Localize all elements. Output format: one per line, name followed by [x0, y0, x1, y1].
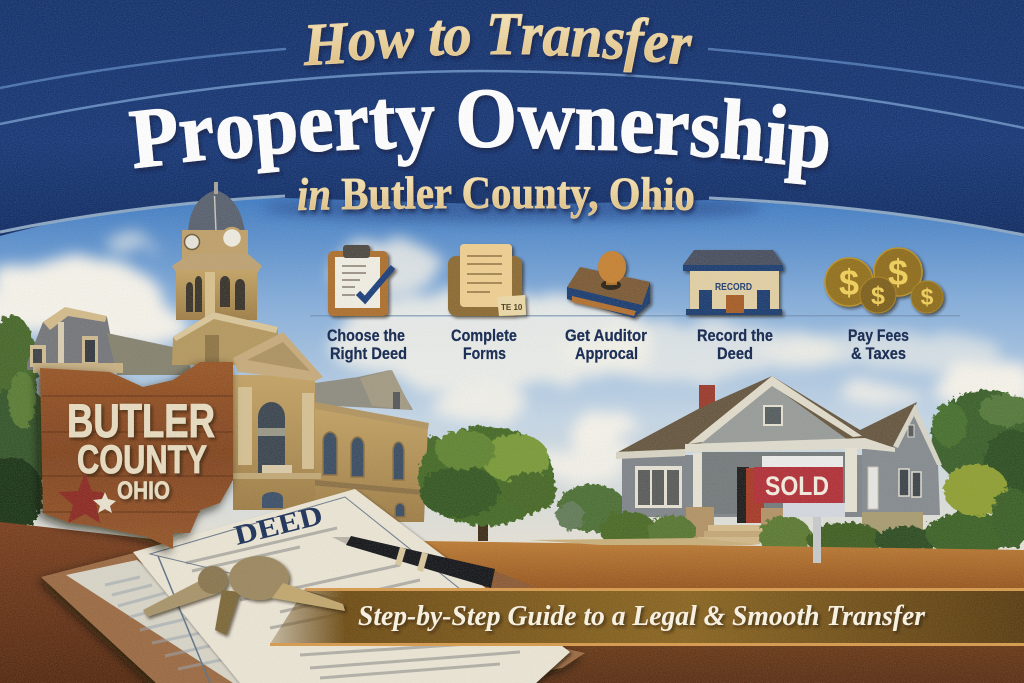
table: left wood	[0, 522, 260, 683]
courthouse: right wing	[240, 370, 429, 522]
folder: brown backing	[41, 553, 585, 683]
arc line: upper	[0, 49, 1024, 88]
step 3: get auditor approval	[565, 251, 650, 363]
steps row	[310, 244, 960, 363]
icon: forms folder: TE 10	[501, 303, 523, 312]
keys	[143, 556, 345, 635]
icon: gold coins: $	[839, 262, 859, 303]
arc line: lower	[0, 196, 1024, 235]
text: DEED heading: DEED	[231, 500, 326, 552]
text: complete forms: Complete	[451, 326, 517, 345]
text: BUTLER: BUTLER	[67, 394, 215, 447]
deed documents	[41, 489, 585, 683]
pen	[332, 536, 535, 589]
text: record the deed: Deed	[717, 344, 753, 363]
courthouse: tower	[172, 182, 278, 365]
house	[616, 376, 942, 544]
text: complete forms: Forms	[463, 344, 506, 363]
trees: far right	[931, 390, 1024, 510]
courthouse: left mansard wing	[27, 307, 192, 375]
house: main body	[616, 376, 895, 542]
icon: red star	[58, 473, 107, 523]
background: sky	[0, 170, 1024, 570]
icon: gold coins	[825, 248, 943, 313]
ohio wood sign	[40, 362, 233, 549]
text: COUNTY: COUNTY	[77, 438, 207, 482]
text: choose the right deed: Right Deed	[330, 344, 407, 363]
step 5: pay fees and taxes	[825, 248, 943, 363]
icon: white star	[93, 492, 116, 513]
step 4: record the deed	[683, 250, 783, 363]
icon: gold coins: $	[888, 252, 908, 293]
house: right wing	[862, 404, 942, 533]
document: deed sheet	[133, 489, 570, 683]
text: get auditor approcal: Get Auditor	[565, 326, 647, 345]
ground: wooden surface	[0, 540, 1024, 683]
house: steps	[698, 525, 763, 544]
icon: record building: RECORD	[715, 282, 752, 293]
text: choose the right deed: Choose the	[327, 326, 405, 345]
document: lower sheet	[66, 560, 300, 683]
text: pay fees and taxes: & Taxes	[851, 344, 906, 363]
house: chimney	[699, 385, 715, 413]
text: pay fees and taxes: Pay Fees	[848, 326, 909, 345]
step rule	[310, 315, 960, 316]
tree: central	[418, 426, 556, 541]
title line: in Butler County, Ohio: in Butler County, Ohio	[298, 176, 698, 224]
bushes	[600, 464, 1024, 558]
clouds	[0, 235, 1024, 484]
house: roof	[618, 376, 917, 452]
title line: Property Ownership: Property Ownership	[126, 70, 835, 187]
text: OHIO: OHIO	[117, 477, 170, 505]
banner: step-by-step guide	[270, 588, 1024, 646]
text: get auditor approcal: Approcal	[575, 344, 638, 363]
icon: stamp	[567, 251, 650, 318]
courthouse	[27, 182, 429, 522]
icon: gold coins: $	[871, 282, 885, 310]
arc line: middle	[0, 71, 1024, 128]
trees: behind courthouse right	[414, 435, 626, 532]
icon: gold coins: $	[921, 284, 934, 310]
step 2: complete forms	[448, 244, 526, 363]
text: record the deed: Record the	[697, 326, 773, 345]
text: banner caption: Step-by-Step Guide to a Legal & Smooth Transfer	[358, 600, 926, 632]
trees: left	[0, 315, 54, 533]
title line: How to Transfer: How to Transfer	[301, 0, 694, 78]
text: SOLD: SOLD	[765, 471, 829, 501]
icon: clipboard with check	[328, 245, 393, 316]
path: pale walkway	[530, 538, 760, 545]
for-sale sign	[754, 456, 845, 563]
courthouse: front pediment block	[233, 332, 323, 510]
step 1: choose the right deed	[327, 245, 407, 363]
header band: blue banner	[0, 0, 1024, 236]
